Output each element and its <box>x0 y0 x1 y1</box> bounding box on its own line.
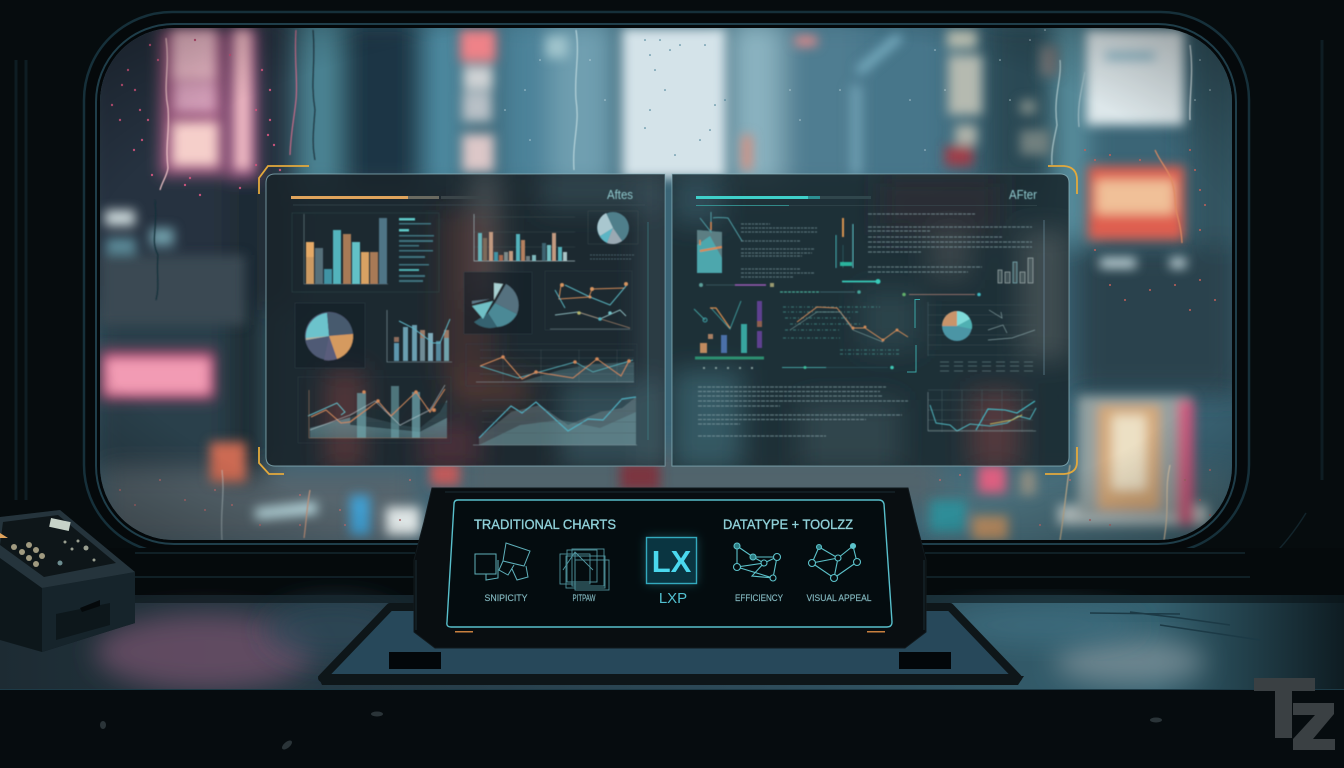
accent rule <box>1043 220 1045 375</box>
logo: Tz watermark <box>1254 678 1335 750</box>
pie chart: quarters <box>295 303 365 368</box>
text block: lower paragraph <box>698 387 908 436</box>
icon: tangled frames <box>560 549 609 590</box>
line chart: lower right <box>928 390 1036 432</box>
label: visual appeal: VISUAL APPEAL <box>806 593 872 604</box>
icon: efficiency network <box>734 543 780 581</box>
combo chart: color bars <box>694 301 764 368</box>
bar chart: main <box>292 213 439 292</box>
badge: LX logo: LX <box>652 544 692 579</box>
combo chart: bars with trend line <box>387 310 452 362</box>
gauge columns <box>836 218 853 268</box>
text block: upper right paragraph <box>868 214 1032 272</box>
holographic panel corner brackets <box>259 166 1077 474</box>
text block: upper left notes <box>741 224 818 277</box>
icon: visual appeal network <box>808 544 860 582</box>
pie chart: small <box>588 211 638 259</box>
panel: left dashboard <box>266 170 670 474</box>
label: fitpaw: PITPAW <box>572 593 596 604</box>
bar chart: small outline <box>998 258 1033 283</box>
bar chart: grouped <box>474 214 575 261</box>
rainy city view through window <box>80 10 1240 550</box>
glass show-through glow <box>672 174 1070 470</box>
panel: right dashboard <box>672 174 1070 470</box>
glass show-through glow <box>325 170 670 474</box>
pie chart: exploded <box>464 272 532 334</box>
progress bar header <box>696 196 1037 206</box>
indicator lights <box>455 631 885 632</box>
panel label: AFter <box>1009 187 1038 202</box>
heading: traditional charts: TRADITIONAL CHARTS <box>474 516 616 532</box>
label: simplicity: SNIPICITY <box>484 593 528 604</box>
window frame <box>84 12 1249 553</box>
chart: pie with grid <box>928 302 1037 371</box>
sliders <box>699 279 981 369</box>
accent rule <box>647 222 649 440</box>
area chart: layered <box>473 397 637 445</box>
badge: LX logo <box>646 537 697 584</box>
line chart: annotated <box>783 307 908 354</box>
line chart: dual series <box>545 271 632 330</box>
window sill <box>0 548 1344 768</box>
brackets around pie chart panel <box>907 300 920 372</box>
diagram: funnel schematic <box>697 212 742 273</box>
progress bar header <box>291 196 645 205</box>
control box on sill <box>0 510 135 652</box>
label: efficiency: EFFICIENCY <box>735 593 784 604</box>
water droplets <box>112 30 1215 525</box>
area chart: mixed <box>298 377 451 443</box>
icon: simplicity shapes <box>475 543 530 580</box>
panel label: Aftes <box>607 187 633 202</box>
console base plate <box>318 607 1024 685</box>
panel: console display <box>414 488 926 648</box>
rain streaks <box>154 30 1192 540</box>
heading: datatype + toolzz: DATATYPE + TOOLZZ <box>723 516 853 532</box>
label: LXP: LXP <box>659 590 687 607</box>
line chart: wide <box>466 344 637 386</box>
screen <box>447 500 892 627</box>
